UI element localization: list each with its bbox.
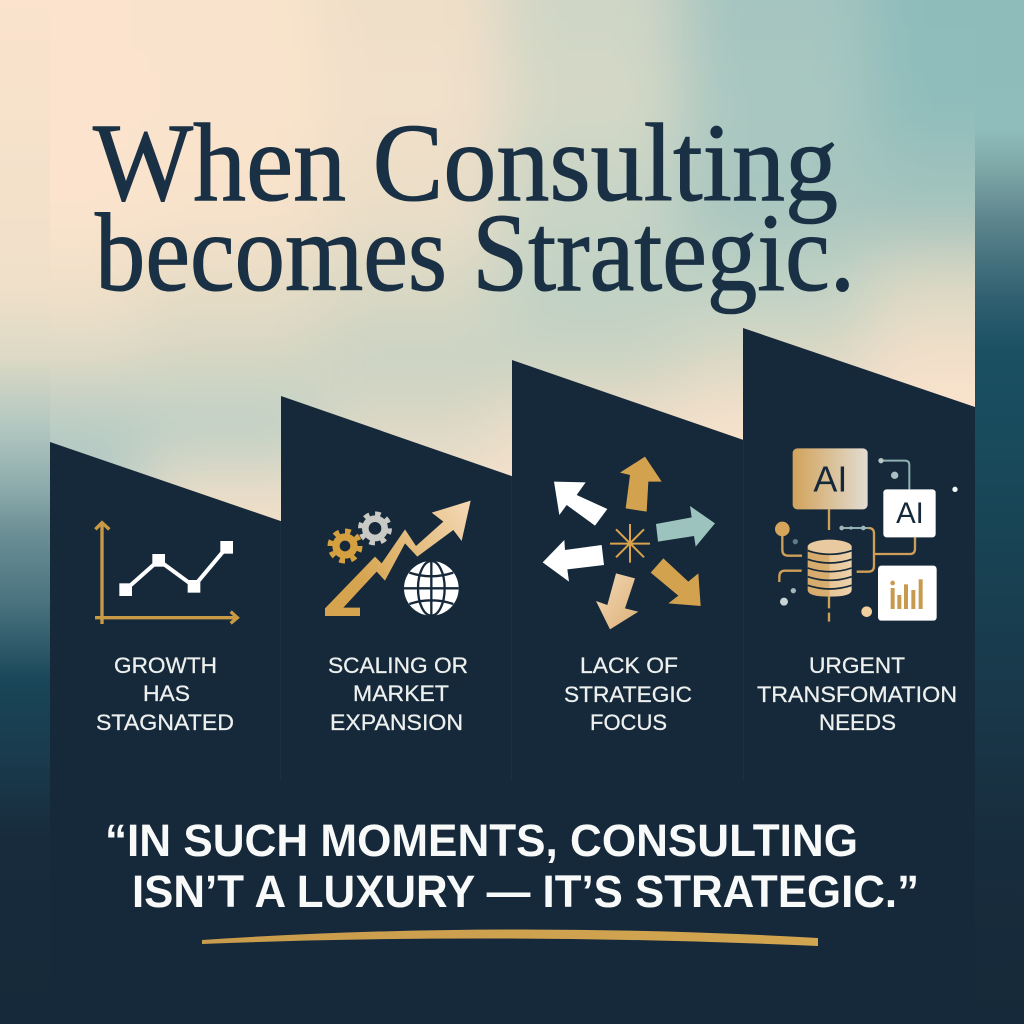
stepped dark panels xyxy=(50,328,975,1024)
gradient background xyxy=(0,0,1024,810)
panel 1: growth has stagnated xyxy=(95,523,237,735)
icon: scattered arrows around a star xyxy=(543,457,715,629)
icon: line chart with axes xyxy=(95,523,237,624)
pull quote: ISN’T A LUXURY — IT’S STRATEGIC.” xyxy=(132,866,919,917)
title: When Consulting xyxy=(93,102,838,225)
label: urgent transformation needs xyxy=(757,653,957,735)
label: growth has stagnated xyxy=(96,653,234,735)
label: growth has stagnated: STAGNATED xyxy=(96,710,234,735)
panel 4: urgent transformation needs xyxy=(757,448,958,735)
label: growth has stagnated: GROWTH xyxy=(114,653,217,678)
gold underline swoosh xyxy=(202,929,818,946)
label: growth has stagnated: HAS xyxy=(143,681,190,706)
label: scaling or market expansion: EXPANSION xyxy=(330,710,463,735)
label: urgent transformation needs: URGENT xyxy=(809,653,905,678)
label: lack of strategic focus: FOCUS xyxy=(590,710,667,735)
panel 3: lack of strategic focus xyxy=(543,457,715,735)
label: lack of strategic focus: STRATEGIC xyxy=(564,682,692,707)
pull quote xyxy=(105,815,919,917)
label: scaling or market expansion: MARKET xyxy=(353,681,449,706)
label: scaling or market expansion: SCALING OR xyxy=(328,653,468,678)
pull quote: “IN SUCH MOMENTS, CONSULTING xyxy=(105,815,858,866)
icon: AI boxes, database and chart xyxy=(775,448,958,622)
label: lack of strategic focus xyxy=(564,653,692,735)
label: urgent transformation needs: NEEDS xyxy=(819,710,896,735)
icon: gears, rising arrow and globe xyxy=(325,501,471,616)
icon: AI boxes, database and chart: AI xyxy=(896,497,924,530)
panel 2: scaling or market expansion xyxy=(325,501,471,735)
title xyxy=(93,102,855,315)
label: lack of strategic focus: LACK OF xyxy=(580,653,678,678)
icon: AI boxes, database and chart: AI xyxy=(813,459,847,500)
title: becomes Strategic. xyxy=(95,192,855,315)
label: urgent transformation needs: TRANSFOMATION xyxy=(757,682,957,707)
label: scaling or market expansion xyxy=(328,653,468,735)
